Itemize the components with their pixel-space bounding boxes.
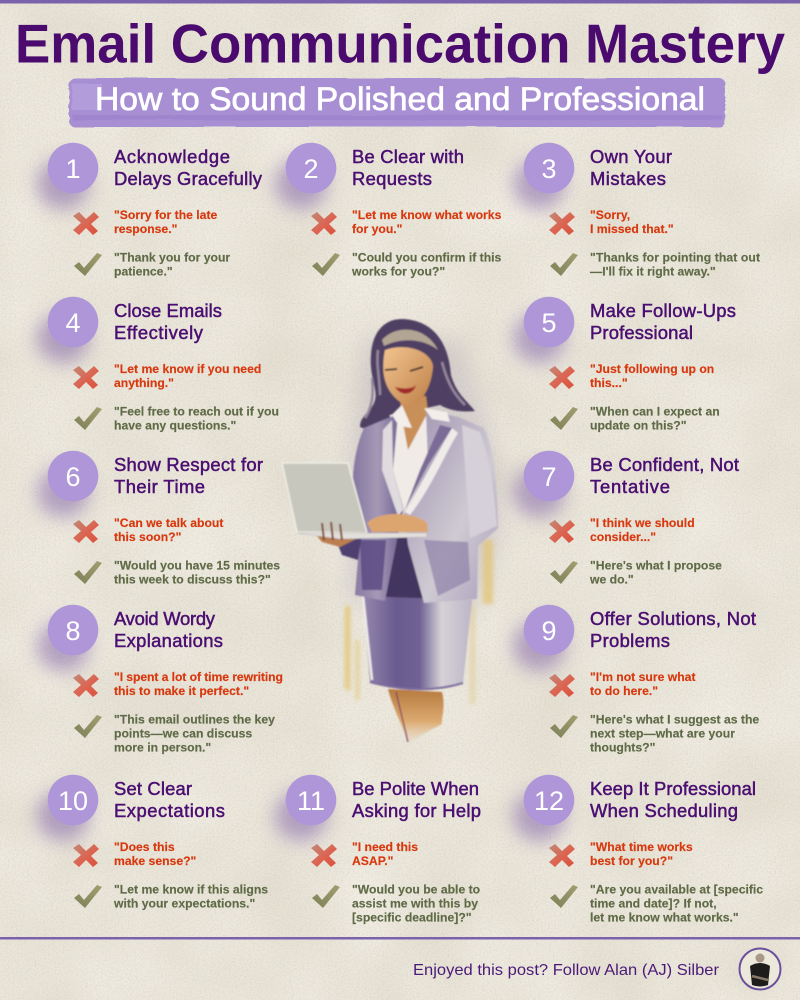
number badge 8 [37,605,98,671]
number badge 3: 3 [541,154,557,184]
bad phrase: "Does this [114,840,175,854]
number badge 5: 5 [541,308,557,338]
bad phrase: "I think we should [590,516,695,530]
number badge 6: 6 [65,462,81,492]
heading 7: Tentative [590,476,670,497]
good phrase: this week to discuss this?" [114,572,271,586]
icon: check [550,253,578,276]
footer text: Enjoyed this post? Follow Alan (AJ) Silber [413,962,720,979]
tip 1 [37,143,263,278]
tip 4 [37,297,279,432]
icon: cross [73,366,99,389]
jacket left [352,414,403,601]
heading 1: Acknowledge [114,146,230,167]
heading 7: Be Confident, Not [590,454,739,475]
tip 11 [275,775,481,924]
soft shadow behind figure [345,340,505,620]
icon: cross [73,520,99,543]
bad phrase: "Can we talk about [114,516,223,530]
bad phrase: "Just following up on [590,362,714,376]
bad phrase: "I'm not sure what [590,670,696,684]
heading 4: Close Emails [114,300,222,321]
icon: cross [73,844,99,867]
bad phrase: I missed that." [590,222,674,236]
bad phrase: response." [114,222,177,236]
good phrase: "This email outlines the key [114,712,275,726]
icon: cross [549,520,575,543]
icon: check [550,561,578,584]
good phrase: update on this?" [590,418,687,432]
number badge 2: 2 [303,154,319,184]
number badge 1: 1 [65,154,81,184]
heading 4: Effectively [114,322,204,343]
heading 12: Keep It Professional [590,778,756,799]
bad phrase: anything." [114,376,174,390]
good phrase: "Could you confirm if this [352,250,502,264]
bad phrase: for you." [352,222,402,236]
bad phrase: best for you?" [590,854,673,868]
number badge 4: 4 [65,308,81,338]
number badge 5 [513,297,574,363]
good phrase: "Here's what I propose [590,558,722,572]
heading 1: Delays Gracefully [114,168,263,189]
heading 6: Their Time [114,476,205,497]
good phrase: we do." [589,572,634,586]
icon: check [74,253,102,276]
icon: cross [549,674,575,697]
tip 6 [37,451,280,586]
bad phrase: to do here." [590,684,658,698]
bad phrase: "I spent a lot of time rewriting [114,670,283,684]
heading 9: Offer Solutions, Not [590,608,756,629]
bad phrase: "I need this [352,840,418,854]
icon: cross [549,366,575,389]
top rule [0,0,800,4]
icon: check [550,885,578,908]
bad phrase: this..." [590,376,628,390]
heading 11: Asking for Help [352,800,481,821]
tip 12 [513,775,763,924]
subtitle banner [69,78,725,127]
number badge 2 [275,143,336,209]
good phrase: time and date]? If not, [590,896,717,910]
heading 10: Expectations [114,800,225,821]
icon: check [74,407,102,430]
good phrase: "Thank you for your [114,250,230,264]
good phrase: next step—what are your [590,726,735,740]
icon: check [550,715,578,738]
number badge 10: 10 [58,786,88,816]
number badge 11 [275,775,336,841]
bad phrase: "Let me know what works [352,208,502,222]
heading 5: Make Follow-Ups [590,300,736,321]
good phrase: —I'll fix it right away." [590,264,716,278]
subtitle text: How to Sound Polished and Professional [95,81,705,117]
number badge 9 [513,605,574,671]
heading 12: When Scheduling [590,800,738,821]
good phrase: [specific deadline]?" [352,910,472,924]
good phrase: "Are you available at [specific [590,882,763,896]
icon: check [74,885,102,908]
footer rule [0,937,800,940]
number badge 8: 8 [65,616,81,646]
tip 2 [275,143,502,278]
number badge 7 [513,451,574,517]
tip 7 [513,451,739,586]
illustration: woman with laptop [282,319,505,743]
good phrase: "Feel free to reach out if you [114,404,279,418]
bad phrase: this to make it perfect." [114,684,249,698]
good phrase: "Thanks for pointing that out [590,250,760,264]
heading 3: Mistakes [590,168,666,189]
icon: check [74,561,102,584]
legs [388,689,444,743]
number badge 7: 7 [541,462,557,492]
heading 8: Explanations [114,630,223,651]
lapels [405,428,458,515]
neck and shirt [390,410,428,512]
good phrase: with your expectations." [113,896,255,910]
number badge 9: 9 [541,616,557,646]
brush stroke [69,78,725,127]
heading 5: Professional [590,322,693,343]
number badge 12: 12 [534,786,564,816]
good phrase: let me know what works." [590,910,739,924]
good phrase: points—we can discuss [114,726,252,740]
bad phrase: consider..." [590,530,656,544]
tip 8 [37,605,283,754]
icon: cross [73,674,99,697]
icon: cross [549,212,575,235]
icon: check [312,253,340,276]
tip 5 [513,297,736,432]
skirt [363,596,472,689]
heading 10: Set Clear [114,778,192,799]
good phrase: "When can I expect an [590,404,720,418]
title: Email Communication Mastery [15,12,785,74]
collar [392,405,450,428]
arm and hands [336,534,362,560]
laptop [282,463,367,533]
good phrase: thoughts?" [590,740,655,754]
icon: cross [311,212,337,235]
bad phrase: this soon?" [114,530,181,544]
face [383,347,433,407]
jacket right [404,410,498,603]
good phrase: patience." [114,264,173,278]
icon: check [74,715,102,738]
number badge 12 [513,775,574,841]
icon: cross [549,844,575,867]
heading 11: Be Polite When [352,778,479,799]
tip 3 [513,143,760,278]
bad phrase: "Sorry, [590,208,630,222]
bad phrase: "What time works [590,840,693,854]
number badge 10 [37,775,98,841]
tip 9 [513,605,759,754]
good phrase: "Here's what I suggest as the [590,712,759,726]
heading 2: Requests [352,168,432,189]
dark inner top [360,535,440,605]
number badge 3 [513,143,574,209]
number badge 4 [37,297,98,363]
icon: check [312,885,340,908]
icon: cross [311,844,337,867]
heading 8: Avoid Wordy [114,608,216,629]
tip 10 [37,775,268,910]
avatar [740,948,780,990]
heading 6: Show Respect for [114,454,263,475]
bad phrase: ASAP." [352,854,393,868]
number badge 1 [37,143,98,209]
bad phrase: "Sorry for the late [114,208,218,222]
icon: cross [73,212,99,235]
hair [360,319,475,429]
good phrase: more in person." [114,740,211,754]
good phrase: works for you?" [351,264,445,278]
good phrase: have any questions." [114,418,236,432]
good phrase: "Would you have 15 minutes [114,558,280,572]
bad phrase: "Let me know if you need [114,362,261,376]
heading 9: Problems [590,630,670,651]
icon: check [550,407,578,430]
watercolor streaks [345,540,493,704]
bad phrase: make sense?" [114,854,196,868]
heading 3: Own Your [590,146,672,167]
good phrase: assist me with this by [352,896,478,910]
number badge 11: 11 [297,786,325,816]
good phrase: "Would you be able to [352,882,480,896]
number badge 6 [37,451,98,517]
good phrase: "Let me know if this aligns [114,882,268,896]
heading 2: Be Clear with [352,146,464,167]
